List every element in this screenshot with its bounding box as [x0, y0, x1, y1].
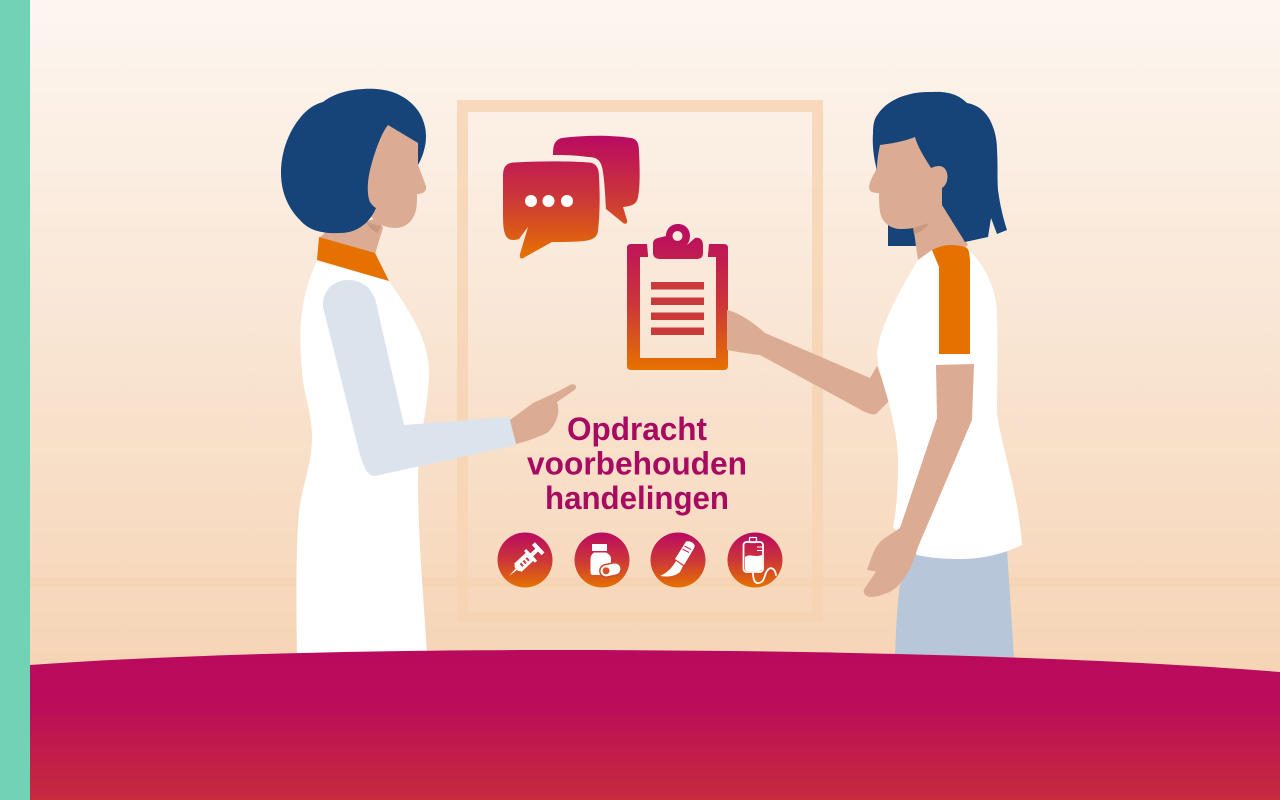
icon: infusion bag: [728, 532, 782, 588]
heading: Opdracht: [567, 411, 707, 447]
sleeve: [323, 280, 516, 476]
extended arm: [727, 310, 890, 414]
icon: medicine bottle and pill: [574, 532, 630, 588]
pointing hand: [510, 384, 576, 444]
poster frame: [457, 100, 823, 622]
figure: nurse on the right: [727, 92, 1022, 657]
bubble dots: [525, 195, 573, 207]
neck: [913, 205, 968, 260]
shirt: [877, 248, 1022, 559]
wall stripe: [30, 577, 1280, 587]
icon: speech bubbles: [503, 136, 640, 258]
neck shadow: [913, 223, 929, 234]
face: [366, 122, 426, 228]
heading: handelingen: [545, 480, 729, 516]
collar: [317, 237, 389, 281]
hanging arm and hand: [864, 364, 974, 597]
bottom band: [30, 650, 1280, 800]
back hair: [888, 215, 990, 246]
heading: voorbehouden: [527, 446, 747, 482]
icon: clipboard: [627, 224, 728, 370]
figure: doctor on the left: [281, 89, 576, 655]
icon: syringe: [498, 532, 552, 588]
skirt: [895, 550, 1014, 657]
orange shoulder: [932, 245, 970, 354]
face: [869, 135, 947, 229]
white coat: [296, 261, 429, 655]
clipboard lines: [651, 282, 704, 335]
hair: [873, 92, 1007, 242]
neck shadow: [366, 222, 381, 233]
neck: [319, 218, 383, 254]
teal side bar: [0, 0, 30, 800]
heading: [527, 411, 747, 516]
icon: scalpel: [650, 532, 706, 588]
hair: [281, 89, 426, 233]
